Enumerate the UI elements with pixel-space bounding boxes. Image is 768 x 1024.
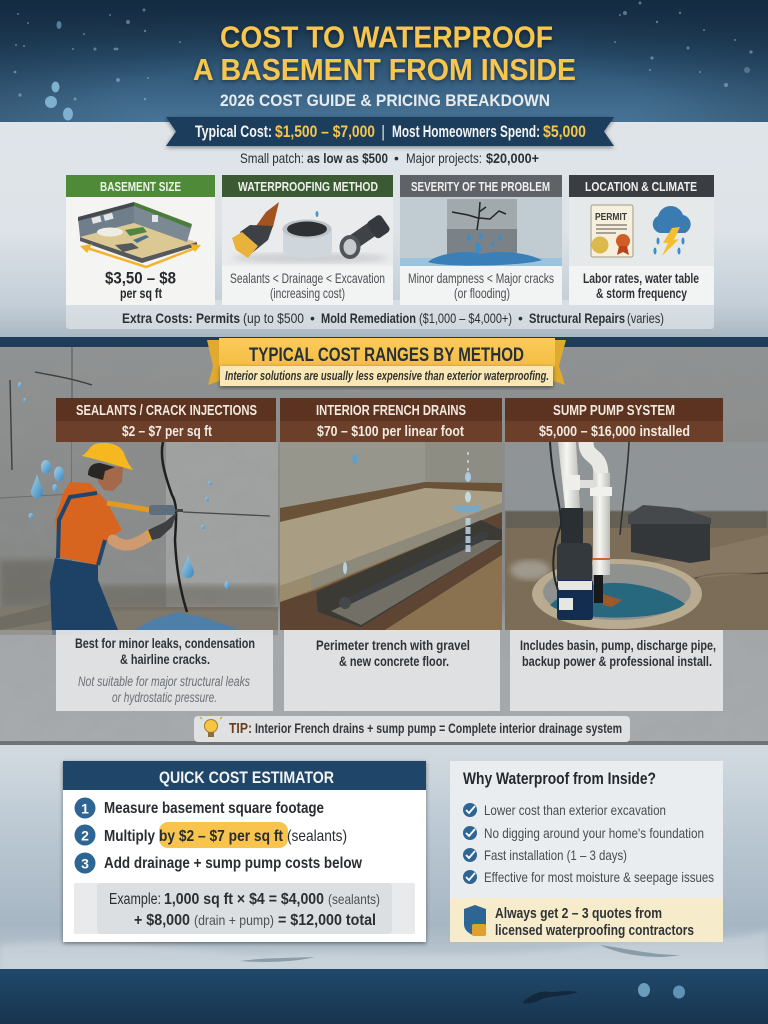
lower wall band [0, 630, 768, 745]
typical cost ribbon: | [381, 123, 385, 141]
heading: severity: SEVERITY OF THE PROBLEM [411, 179, 550, 194]
panel: basement size [66, 175, 215, 305]
method text: Sealants < Drainage < Excavation [230, 270, 385, 286]
worker figure [50, 443, 183, 635]
worked example: = $12,000 total [278, 912, 376, 929]
icon: light bulb [200, 713, 222, 737]
severity text: Minor dampness < Major cracks [408, 270, 554, 286]
title [193, 20, 576, 87]
step 2: Multiply [104, 828, 155, 845]
icon: paint brush [232, 202, 279, 258]
text panel: sealants: Best for minor leaks, condensation [75, 635, 255, 651]
photo: worker injecting sealant into a crack [0, 382, 278, 635]
worked example: + $8,000 [134, 912, 190, 929]
photo: french drain trench [280, 442, 502, 630]
step 2: 2 [81, 828, 89, 844]
method price: sealants: $2 – $7 per sq ft [122, 424, 212, 440]
benefit list: No digging around your home's foundation [484, 825, 704, 841]
small patch and major projects line: Small patch: [240, 150, 304, 166]
text panel: french drains: Perimeter trench with gravel [316, 637, 470, 653]
small patch and major projects line: $20,000+ [486, 150, 539, 166]
column: sealants [56, 398, 276, 442]
icon: storm cloud [653, 206, 691, 256]
icon: permit document [591, 205, 633, 257]
text panel: sealants: & hairline cracks. [120, 651, 210, 667]
tip bar: Interior French drains + sump pump = Complete interior drainage system [255, 720, 622, 736]
light section background [0, 122, 768, 338]
tip bar [194, 713, 630, 742]
typical cost ribbon: Typical Cost: [195, 123, 272, 141]
panel: severity of the problem [400, 175, 562, 305]
price per square foot: $3,50 – $8 [105, 268, 176, 288]
title: A BASEMENT FROM INSIDE [193, 52, 576, 87]
sump basin [532, 559, 702, 629]
tip bar: TIP: [229, 721, 252, 737]
method price: sump pump: $5,000 – $16,000 installed [539, 424, 690, 440]
column: french drains [280, 398, 502, 442]
price per square foot [105, 268, 176, 301]
heading: quick cost estimator: QUICK COST ESTIMATOR [159, 769, 334, 787]
subtitle: 2026 COST GUIDE & PRICING BREAKDOWN [220, 92, 550, 110]
worked example [74, 883, 415, 934]
step 2: by $2 – $7 per sq ft [159, 828, 284, 845]
extra costs strip: Structural Repairs [529, 310, 625, 326]
method text [230, 270, 385, 301]
extra costs strip: (up to $500 [243, 310, 304, 326]
benefit list: Effective for most moisture & seepage issues [484, 869, 714, 885]
extra costs strip: • [518, 310, 523, 326]
step 3: Add drainage + sump pump costs below [104, 855, 362, 872]
icon: shield badge [464, 905, 486, 936]
worked example: (drain + pump) [194, 912, 274, 928]
heading: typical cost ranges: TYPICAL COST RANGES BY METHOD [249, 345, 524, 366]
small patch and major projects line: Major projects: [406, 150, 482, 166]
bottom band [0, 969, 768, 1024]
bottom section background [0, 745, 768, 970]
heading: waterproofing method: WATERPROOFING METHOD [238, 179, 378, 194]
step 1 [74, 798, 324, 818]
typical cost ribbon [166, 117, 614, 146]
panel: location and climate [569, 175, 714, 305]
step 1: 1 [81, 800, 89, 816]
small patch and major projects line [240, 150, 539, 166]
benefit list [463, 802, 714, 885]
location text: Labor rates, water table [583, 270, 699, 286]
typical cost ribbon: Most Homeowners Spend: [392, 123, 540, 141]
quotes callout: licensed waterproofing contractors [495, 923, 694, 939]
text panel: french drains [284, 630, 500, 711]
pump and pipes [550, 442, 629, 620]
small patch and major projects line: • [394, 150, 399, 166]
extra costs strip: Mold Remediation [321, 310, 416, 326]
icon: sealant can [282, 211, 332, 258]
typical cost ribbon: $5,000 [543, 123, 586, 141]
icon: cracked wall with flooding [400, 197, 562, 266]
extra costs strip: Extra Costs: Permits [122, 310, 240, 326]
banner note: Interior solutions are usually less expensive than exterior waterproofing. [225, 369, 549, 383]
extra costs strip: ($1,000 – $4,000+) [419, 310, 512, 326]
severity text [408, 270, 554, 301]
text panel: french drains: & new concrete floor. [339, 653, 449, 669]
method name: french drains: INTERIOR FRENCH DRAINS [316, 403, 466, 419]
panel: quick cost estimator [63, 761, 426, 942]
method price: french drains: $70 – $100 per linear foot [317, 424, 464, 440]
concrete background [0, 337, 768, 745]
worked example: Example: [109, 891, 161, 908]
panel: waterproofing method [222, 175, 393, 305]
quotes callout: Always get 2 – 3 quotes from [495, 906, 662, 922]
text panel: sump pump: Includes basin, pump, discharge pipe, [520, 637, 716, 653]
location text: & storm frequency [596, 285, 687, 301]
text panel: sealants [56, 630, 273, 711]
extra costs strip [66, 300, 714, 329]
small patch and major projects line: as low as $500 [307, 150, 388, 166]
text panel: sump pump [510, 630, 723, 711]
heading: location and climate: LOCATION & CLIMATE [585, 179, 697, 194]
step 2 [74, 822, 347, 848]
icon: permit document: PERMIT [595, 212, 627, 223]
worked example: 1,000 sq ft × $4 = $4,000 [164, 891, 324, 908]
storage box [628, 505, 711, 563]
text panel: sealants: or hydrostatic pressure. [112, 690, 217, 705]
typical cost ribbon: $1,500 – $7,000 [275, 123, 375, 141]
price per square foot: per sq ft [120, 286, 162, 301]
extra costs strip: • [310, 310, 315, 326]
section banner: typical cost ranges [207, 338, 566, 386]
extra costs strip: (varies) [627, 310, 664, 326]
quotes callout [450, 898, 723, 942]
header background [0, 0, 768, 125]
step 2: (sealants) [287, 828, 347, 845]
location text [583, 270, 699, 301]
heading: why waterproof: Why Waterproof from Inside? [463, 770, 656, 788]
benefit list: Fast installation (1 – 3 days) [484, 847, 627, 863]
step 3: 3 [81, 856, 89, 872]
method name: sump pump: SUMP PUMP SYSTEM [553, 403, 675, 419]
heading: basement size: BASEMENT SIZE [100, 179, 181, 194]
icon: water drops [18, 382, 230, 589]
icon: drainage pipe [340, 214, 391, 259]
severity text: (or flooding) [454, 285, 510, 301]
step 1: Measure basement square footage [104, 800, 324, 817]
photo: sump pump system [505, 442, 768, 630]
column: sump pump [505, 398, 723, 442]
text panel: sealants: Not suitable for major structural leaks [78, 674, 250, 689]
title: COST TO WATERPROOF [220, 20, 553, 54]
step 3 [74, 852, 362, 874]
method name: sealants: SEALANTS / CRACK INJECTIONS [76, 403, 257, 419]
benefit list: Lower cost than exterior excavation [484, 802, 666, 818]
worked example: (sealants) [328, 891, 380, 907]
panel: why waterproof from inside [450, 761, 723, 942]
text panel: sump pump: backup power & professional install. [522, 653, 712, 669]
method text: (increasing cost) [270, 285, 345, 301]
icon: isometric basement [78, 202, 201, 267]
